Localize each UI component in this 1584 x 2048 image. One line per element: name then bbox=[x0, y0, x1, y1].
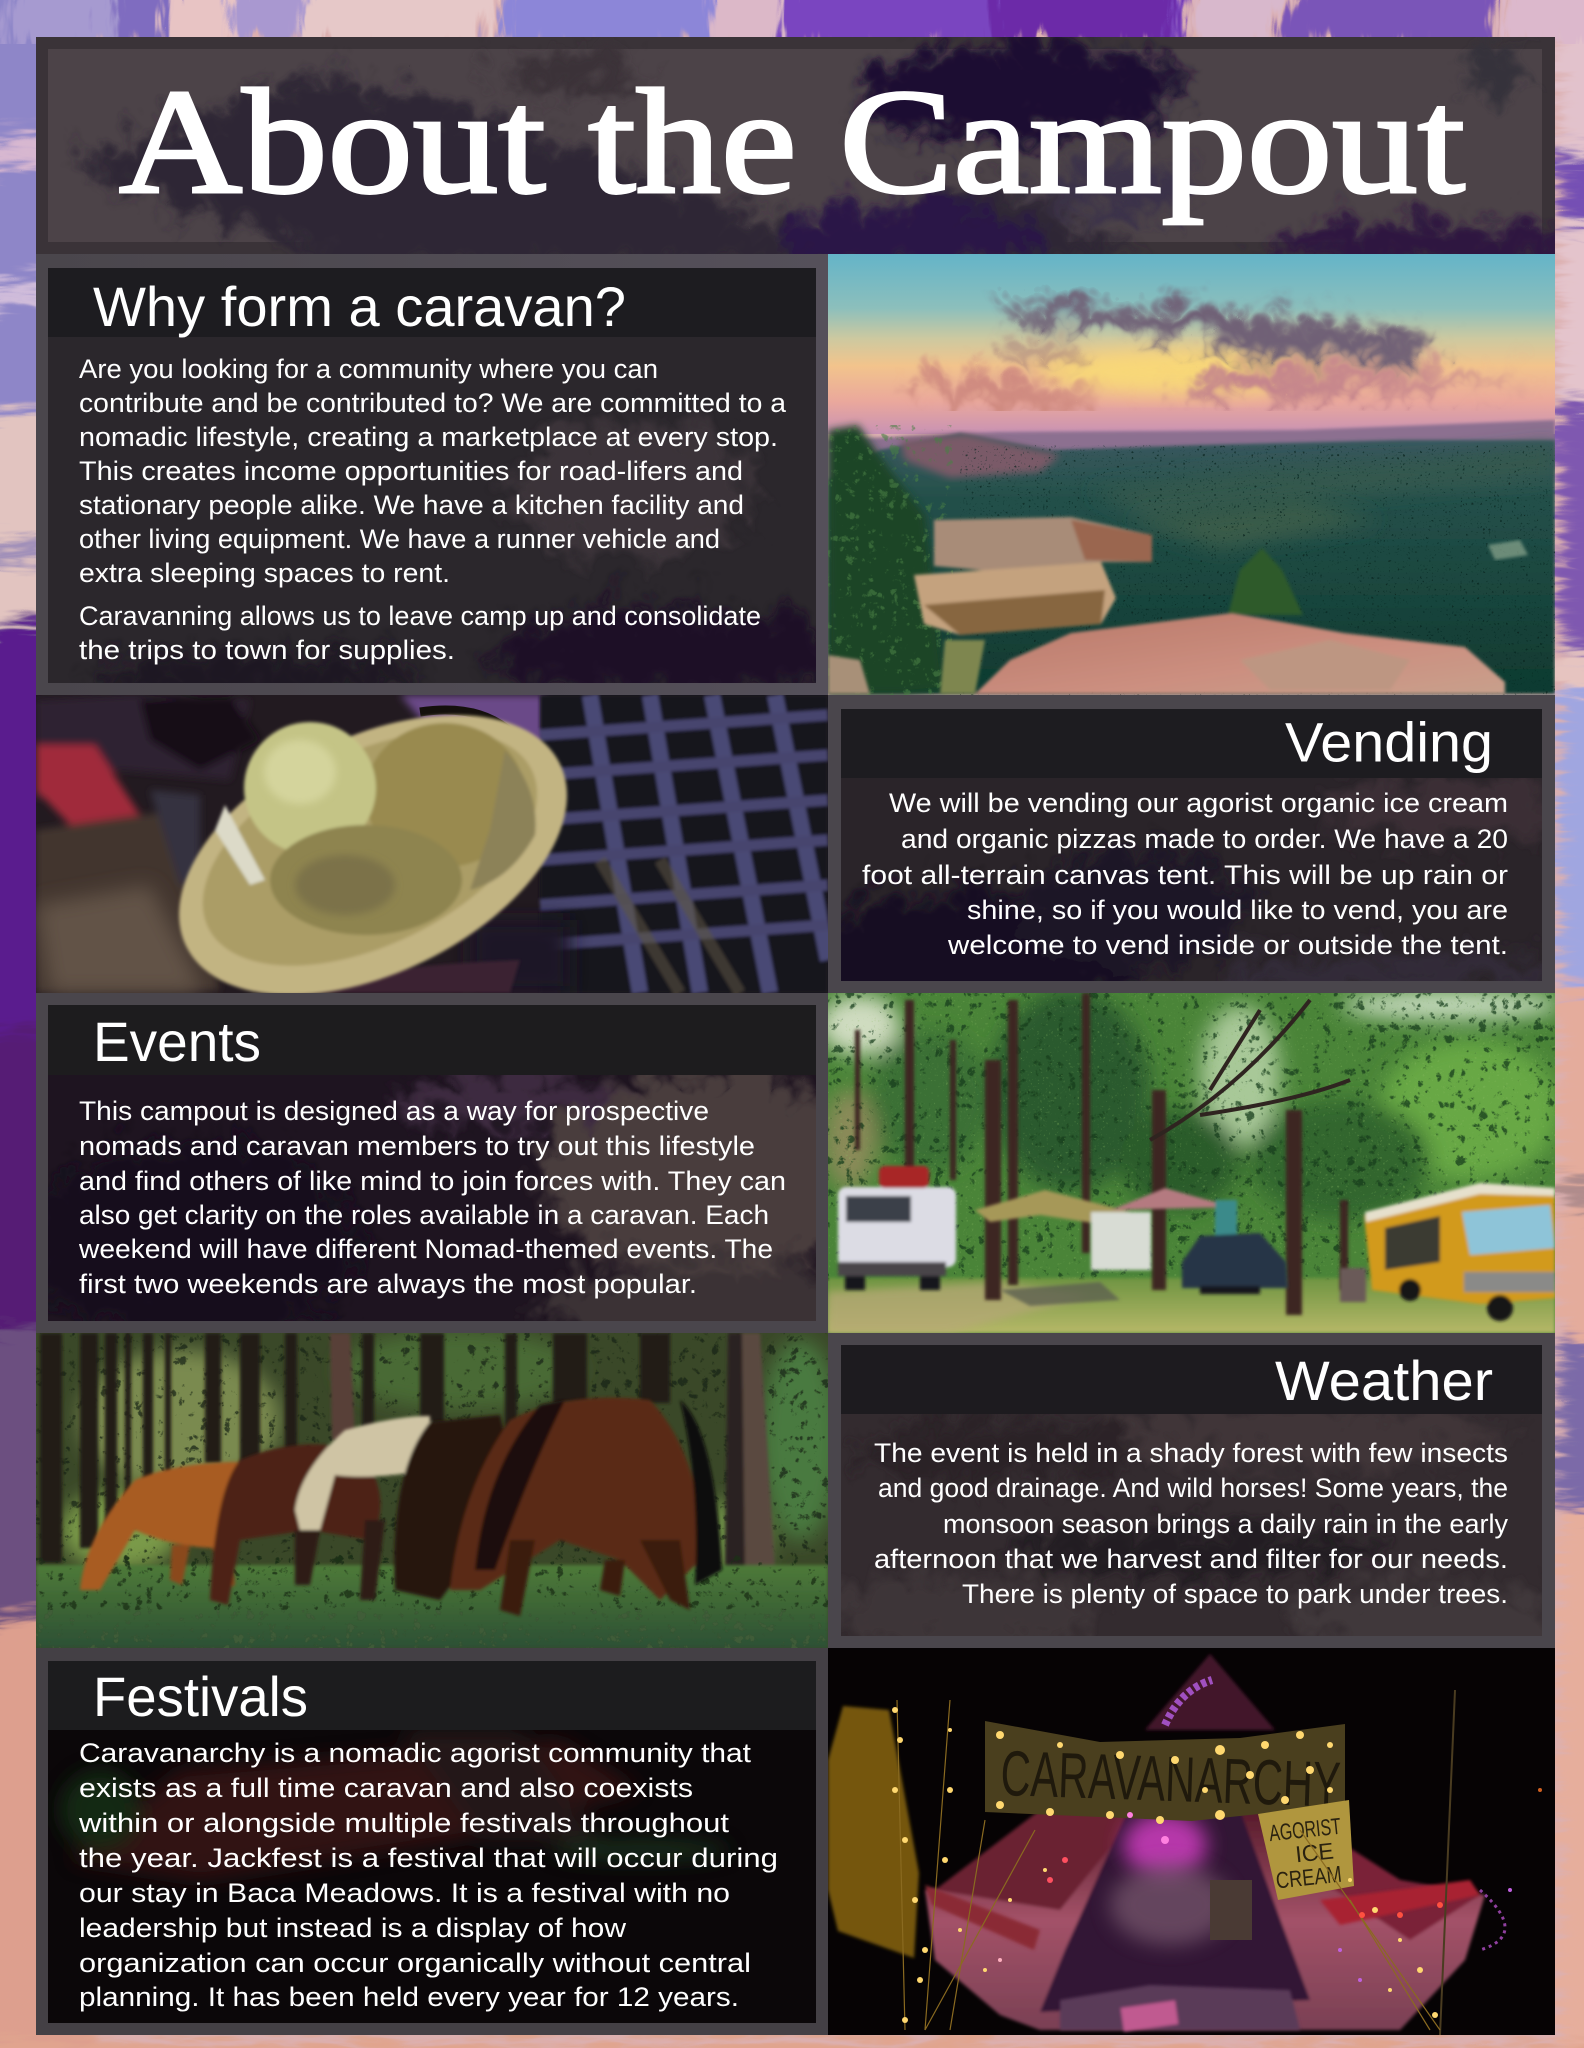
photo: wild horses grazing in pine forest bbox=[36, 1333, 828, 1648]
text: why form a caravan body: extra sleeping spaces to rent. bbox=[79, 558, 450, 588]
heading: vending: Vending bbox=[1285, 710, 1493, 774]
panel: why form a caravan bbox=[36, 254, 828, 695]
banner: Caravanarchy bbox=[985, 1721, 1345, 1821]
text: festivals body: Caravanarchy is a nomadic agorist community that bbox=[79, 1738, 752, 1768]
text: why form a caravan body: Are you looking for a community where you can bbox=[79, 354, 658, 384]
photo: mountain overlook at sunset bbox=[828, 254, 1555, 695]
text: weather body: afternoon that we harvest and filter for our needs. bbox=[874, 1544, 1508, 1574]
text: vending body: welcome to vend inside or outside the tent. bbox=[947, 930, 1508, 960]
text: festivals body: exists as a full time caravan and also coexists bbox=[79, 1773, 693, 1803]
banner: Caravanarchy: CARAVANARCHY bbox=[1000, 1737, 1342, 1821]
heading: events bbox=[48, 1005, 816, 1075]
title: About the Campout bbox=[119, 59, 1465, 225]
text: why form a caravan body bbox=[79, 354, 787, 665]
heading: festivals: Festivals bbox=[93, 1665, 308, 1728]
text: vending body: foot all-terrain canvas tent. This will be up rain or bbox=[862, 860, 1508, 890]
text: vending body: and organic pizzas made to order. We have a 20 bbox=[901, 824, 1508, 854]
text: weather body bbox=[874, 1438, 1508, 1609]
title band bbox=[36, 30, 1584, 262]
panel: vending bbox=[780, 695, 1555, 1020]
heading: festivals bbox=[48, 1661, 816, 1730]
text: weather body: monsoon season brings a daily rain in the early bbox=[943, 1509, 1508, 1539]
text: vending body: We will be vending our agorist organic ice cream bbox=[889, 788, 1508, 818]
heading: why form a caravan bbox=[48, 268, 816, 338]
text: vending body: shine, so if you would like to vend, you are bbox=[967, 895, 1508, 925]
text: festivals body: organization can occur organically without central bbox=[79, 1948, 751, 1978]
text: events body: first two weekends are always the most popular. bbox=[79, 1269, 697, 1299]
text: events body bbox=[78, 1096, 786, 1299]
sign: agorist ice cream: CREAM bbox=[1275, 1861, 1343, 1893]
text: festivals body: our stay in Baca Meadows. It is a festival with no bbox=[79, 1878, 730, 1908]
text: festivals body: within or alongside multiple festivals throughout bbox=[78, 1808, 730, 1838]
panel: events bbox=[10, 993, 870, 1350]
text: festivals body: the year. Jackfest is a festival that will occur during bbox=[79, 1843, 778, 1873]
text: events body: and find others of like mind to join forces with. They can bbox=[79, 1166, 786, 1196]
text: events body: nomads and caravan members to try out this lifestyle bbox=[79, 1131, 755, 1161]
photo: campsite with van, tents and yellow bus bbox=[828, 993, 1555, 1333]
panel: weather bbox=[820, 1333, 1555, 1650]
heading: events: Events bbox=[93, 1010, 261, 1073]
heading: weather: Weather bbox=[1275, 1349, 1493, 1412]
text: weather body: and good drainage. And wild horses! Some years, the bbox=[878, 1473, 1508, 1503]
text: festivals body: planning. It has been held every year for 12 years. bbox=[79, 1982, 739, 2012]
panel: festivals bbox=[36, 1648, 828, 2035]
text: festivals body bbox=[78, 1738, 778, 2012]
text: festivals body: leadership but instead is a display of how bbox=[79, 1913, 627, 1943]
heading: why form a caravan: Why form a caravan? bbox=[93, 275, 626, 338]
sign: agorist ice cream bbox=[1258, 1800, 1354, 1900]
text: vending body bbox=[862, 788, 1508, 960]
text: events body: also get clarity on the roles available in a caravan. Each bbox=[79, 1200, 769, 1230]
text: why form a caravan body: stationary people alike. We have a kitchen facility and bbox=[79, 490, 744, 520]
text: why form a caravan body: This creates income opportunities for road-lifers and bbox=[79, 456, 743, 486]
heading: weather bbox=[841, 1345, 1542, 1414]
sign: agorist ice cream: AGORIST bbox=[1268, 1813, 1342, 1846]
text: events body: This campout is designed as a way for prospective bbox=[79, 1096, 709, 1126]
text: why form a caravan body: the trips to town for supplies. bbox=[79, 635, 455, 665]
heading: vending bbox=[841, 709, 1542, 778]
photo: Caravanarchy bell tent at night bbox=[828, 1648, 1555, 2035]
text: weather body: The event is held in a shady forest with few insects bbox=[874, 1438, 1508, 1468]
text: weather body: There is plenty of space to park under trees. bbox=[962, 1579, 1508, 1609]
text: why form a caravan body: contribute and be contributed to? We are committed to a bbox=[79, 388, 787, 418]
photo: ice cream on a plate bbox=[36, 695, 828, 993]
text: events body: weekend will have different Nomad-themed events. The bbox=[78, 1234, 773, 1264]
sign: agorist ice cream: ICE bbox=[1294, 1838, 1335, 1867]
text: why form a caravan body: nomadic lifestyle, creating a marketplace at every stop. bbox=[79, 422, 778, 452]
text: why form a caravan body: other living equipment. We have a runner vehicle and bbox=[79, 524, 720, 554]
text: why form a caravan body: Caravanning allows us to leave camp up and consolidate bbox=[79, 601, 761, 631]
